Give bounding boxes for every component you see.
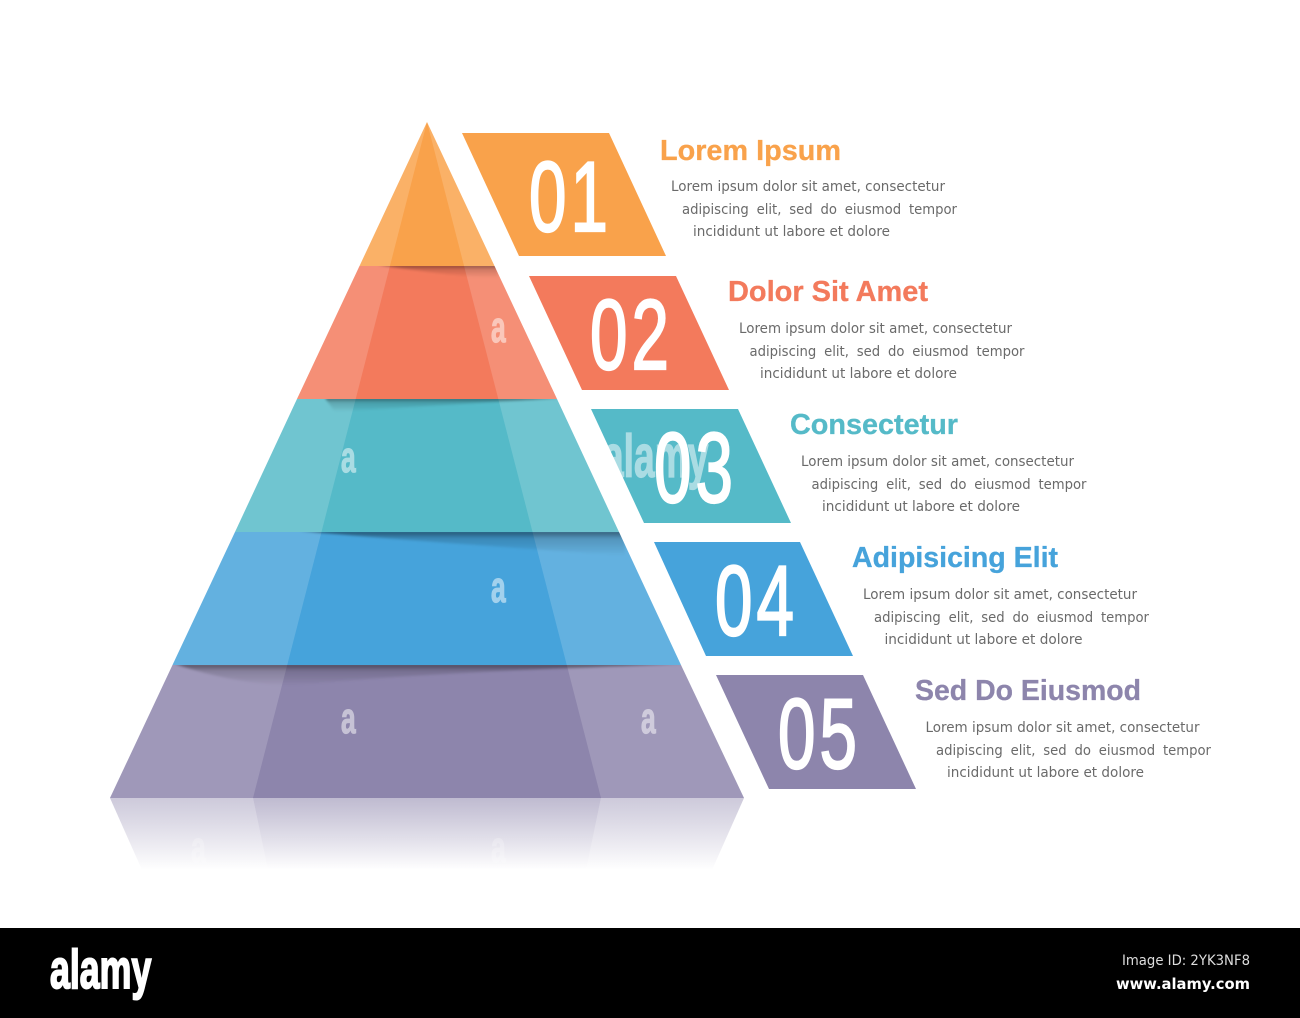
heading 2: Dolor Sit Amet	[728, 276, 928, 308]
number 02: 02	[590, 279, 673, 390]
step 2	[529, 276, 1025, 390]
shadow under tier 4	[176, 665, 672, 682]
footer bar	[0, 928, 1300, 1018]
number 04: 04	[715, 545, 798, 656]
description 2	[739, 321, 1025, 382]
step 5	[716, 675, 1211, 789]
description 3	[801, 454, 1087, 515]
description 5: incididunt ut labore et dolore	[947, 765, 1144, 781]
heading 1: Lorem Ipsum	[660, 135, 841, 167]
description 5	[926, 720, 1211, 781]
watermark letters on pyramid: a	[491, 562, 506, 612]
right translucent facet	[427, 122, 744, 798]
description 3: incididunt ut labore et dolore	[822, 499, 1020, 515]
watermark letters on pyramid	[191, 302, 656, 872]
description 5: adipiscing elit, sed do eiusmod tempor	[936, 743, 1211, 759]
description 3: Lorem ipsum dolor sit amet, consectetur	[801, 454, 1074, 470]
watermark letters on pyramid: a	[341, 693, 356, 743]
description 1: incididunt ut labore et dolore	[693, 224, 890, 240]
description 2: adipiscing elit, sed do eiusmod tempor	[750, 344, 1025, 360]
heading 3: Consectetur	[790, 409, 958, 441]
number 03: 03	[654, 412, 737, 523]
label block 04	[654, 542, 853, 656]
description 3: adipiscing elit, sed do eiusmod tempor	[812, 477, 1087, 493]
footer logo: alamy	[50, 938, 152, 1000]
pyramid tier 2	[297, 266, 557, 399]
description 5: Lorem ipsum dolor sit amet, consectetur	[926, 720, 1200, 736]
step 3	[591, 409, 1087, 523]
description 4: incididunt ut labore et dolore	[884, 632, 1083, 648]
watermark letters on pyramid: a	[491, 302, 506, 352]
shadow under tier 2	[324, 399, 554, 410]
description 1: Lorem ipsum dolor sit amet, consectetur	[671, 179, 945, 195]
step 4	[654, 542, 1149, 656]
pyramid tier 1	[360, 122, 494, 266]
description 2: Lorem ipsum dolor sit amet, consectetur	[739, 321, 1012, 337]
left translucent facet	[110, 122, 427, 798]
watermark letters on pyramid: a	[341, 432, 356, 482]
label block 05	[716, 675, 916, 789]
description 1	[671, 179, 957, 240]
label block 02	[529, 276, 729, 390]
watermark letters on pyramid: a	[191, 822, 206, 872]
watermark letters on pyramid: a	[641, 693, 656, 743]
website: www.alamy.com	[1116, 975, 1250, 993]
shadow under tier 3	[304, 532, 626, 552]
description 4: Lorem ipsum dolor sit amet, consectetur	[863, 587, 1137, 603]
heading 5: Sed Do Eiusmod	[915, 675, 1141, 707]
pyramid	[110, 122, 744, 870]
pyramid reflection	[110, 798, 744, 870]
description 2: incididunt ut labore et dolore	[760, 366, 957, 382]
shadow under tier 1	[380, 266, 498, 276]
description 4	[863, 587, 1149, 648]
number 01: 01	[529, 141, 612, 252]
label block 01	[462, 133, 666, 256]
watermark letters on pyramid: a	[491, 822, 506, 872]
description 1: adipiscing elit, sed do eiusmod tempor	[682, 202, 957, 218]
watermark alamy: alamy	[603, 423, 709, 490]
pyramid tier 3	[235, 399, 619, 532]
number 05: 05	[778, 678, 861, 789]
image id: Image ID: 2YK3NF8	[1122, 953, 1250, 969]
pyramid tier 4	[172, 532, 681, 665]
description 4: adipiscing elit, sed do eiusmod tempor	[874, 610, 1149, 626]
pyramid tier 5	[110, 665, 744, 798]
heading 4: Adipisicing Elit	[852, 542, 1058, 574]
step 1	[462, 133, 957, 256]
label block 03	[591, 409, 791, 523]
